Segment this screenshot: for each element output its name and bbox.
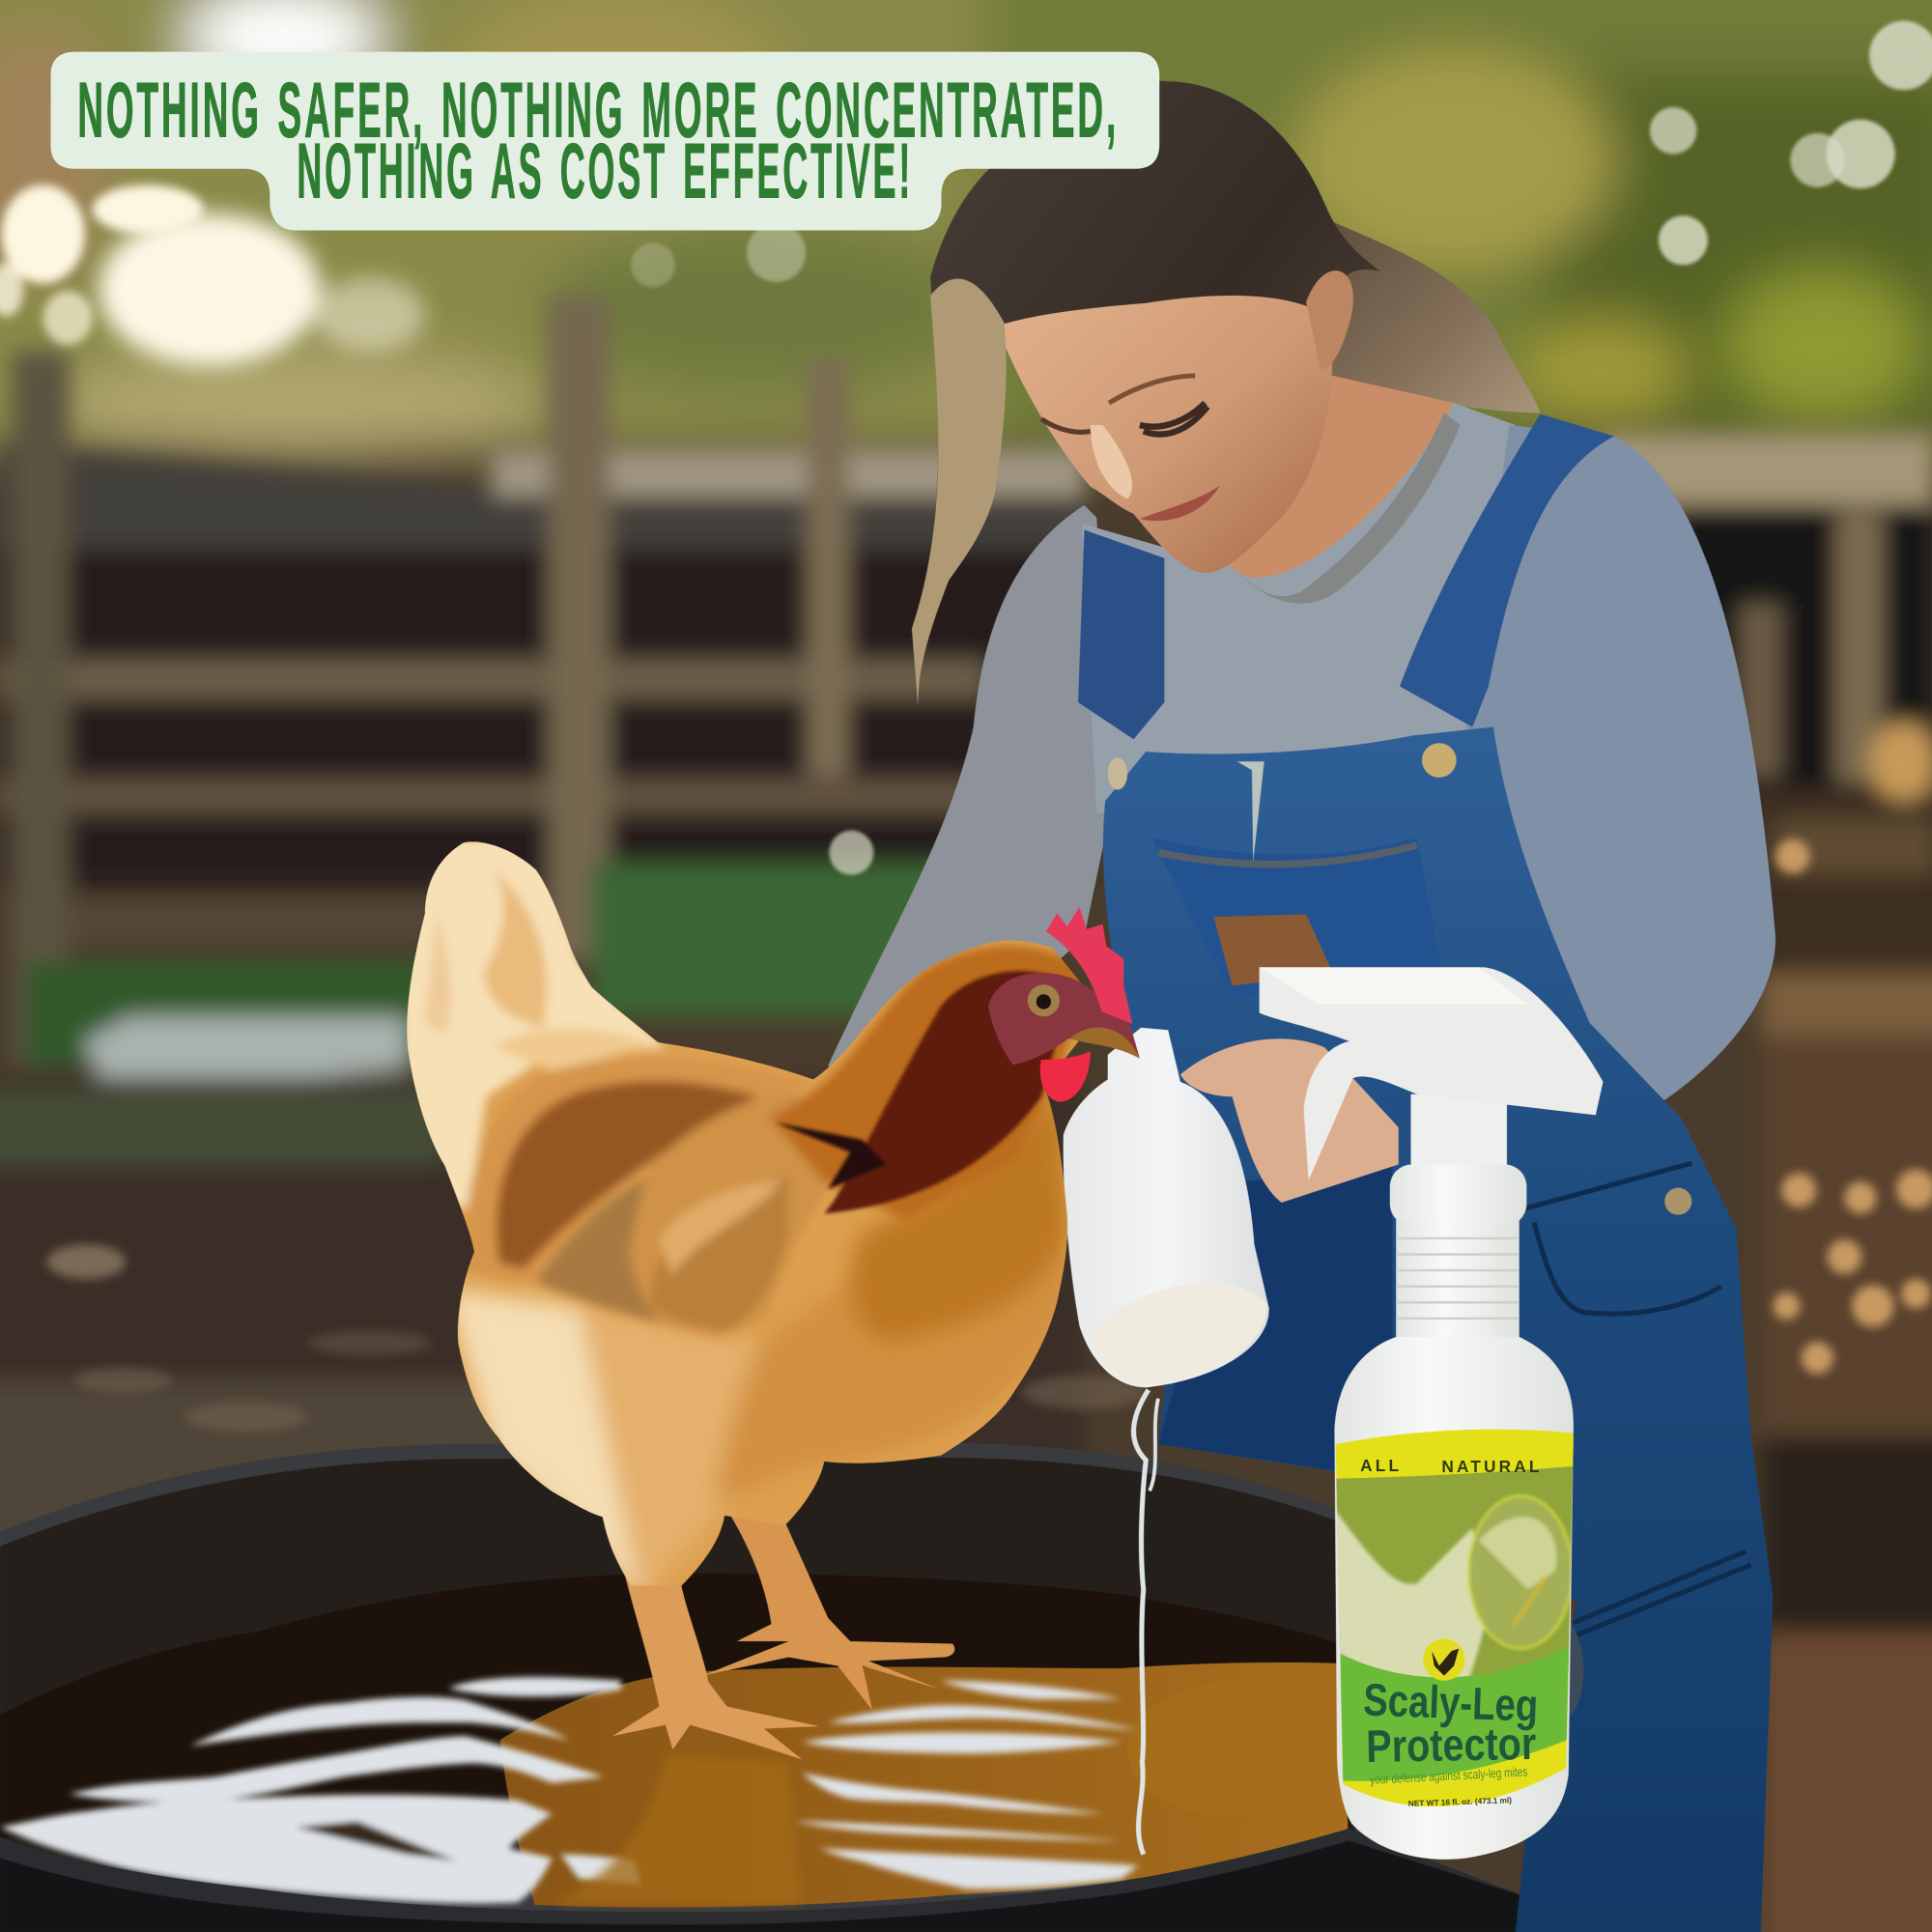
headline text bbox=[77, 68, 1119, 215]
chicken belly bbox=[443, 1288, 640, 1602]
label text: ALL bbox=[1360, 1456, 1402, 1475]
face bbox=[996, 267, 1332, 573]
ground specks bbox=[46, 839, 1932, 1432]
tub rim and wall bbox=[0, 1443, 1368, 1932]
chicken eye bbox=[1028, 984, 1060, 1016]
chicken comb bbox=[1046, 907, 1132, 1024]
chicken head bbox=[988, 973, 1140, 1065]
sweater chest bbox=[1082, 403, 1516, 813]
chicken beak bbox=[1069, 1028, 1140, 1059]
label green band bbox=[1334, 1645, 1574, 1781]
water reflections bbox=[0, 1677, 1139, 1903]
woman bbox=[828, 80, 1776, 1932]
spray bottle bbox=[1260, 967, 1603, 1860]
hair ponytail bbox=[1306, 210, 1540, 412]
ear bbox=[1306, 270, 1353, 370]
bokeh and sun glow bbox=[0, 21, 1932, 875]
headline callout bbox=[50, 52, 1159, 231]
chicken tail bbox=[394, 838, 666, 1208]
chicken near leg bbox=[612, 1565, 819, 1759]
chicken badge bbox=[1423, 1638, 1465, 1681]
bottle neck and ribs bbox=[1410, 1094, 1507, 1171]
chicken wattle bbox=[1040, 1051, 1091, 1101]
neck bbox=[1220, 370, 1454, 596]
chicken rear wing bbox=[466, 1059, 813, 1282]
overall buttons and pocket bbox=[1108, 757, 1127, 790]
chicken front wing bbox=[630, 1092, 838, 1337]
sleeve: her right arm bbox=[828, 505, 1115, 1091]
headline text: NOTHING AS COST EFFECTIVE! bbox=[297, 128, 913, 215]
trigger head bbox=[1260, 967, 1603, 1180]
bottle body bbox=[1334, 1337, 1574, 1860]
chicken bbox=[394, 826, 1140, 1759]
chicken far leg bbox=[702, 1509, 954, 1710]
bottle label bbox=[1335, 1429, 1574, 1806]
spray bottle: Scaly-Leg bbox=[1362, 1675, 1539, 1732]
water tub bbox=[0, 1443, 1528, 1932]
overalls bbox=[1103, 727, 1773, 1932]
sleeve: her left arm bbox=[1466, 425, 1776, 1163]
denim details bbox=[1524, 1163, 1750, 1636]
callout shape bbox=[50, 52, 1159, 231]
water stream bbox=[1134, 1390, 1158, 1855]
overall straps bbox=[1078, 529, 1164, 739]
chicken under wing bbox=[536, 1177, 666, 1324]
spray bottle: NATURAL bbox=[1441, 1457, 1543, 1476]
tub front rim bbox=[0, 1829, 1528, 1932]
hand bbox=[1180, 1038, 1399, 1203]
chicken reflection bbox=[554, 1756, 801, 1904]
chicken neck bbox=[769, 946, 1091, 1220]
spray bottle: Protector bbox=[1366, 1719, 1537, 1773]
tub handle behind bottle bbox=[1565, 1616, 1583, 1719]
water surface bbox=[500, 1662, 1348, 1907]
label photo bbox=[1334, 1466, 1574, 1691]
white jug bbox=[1064, 1028, 1269, 1387]
spray bottle: NET WT 16 fl. oz. (473.1 ml) bbox=[1408, 1795, 1512, 1808]
hair bbox=[912, 80, 1380, 707]
spray bottle: your defense against scaly-leg mites bbox=[1370, 1764, 1528, 1787]
chicken body bbox=[407, 841, 1080, 1586]
